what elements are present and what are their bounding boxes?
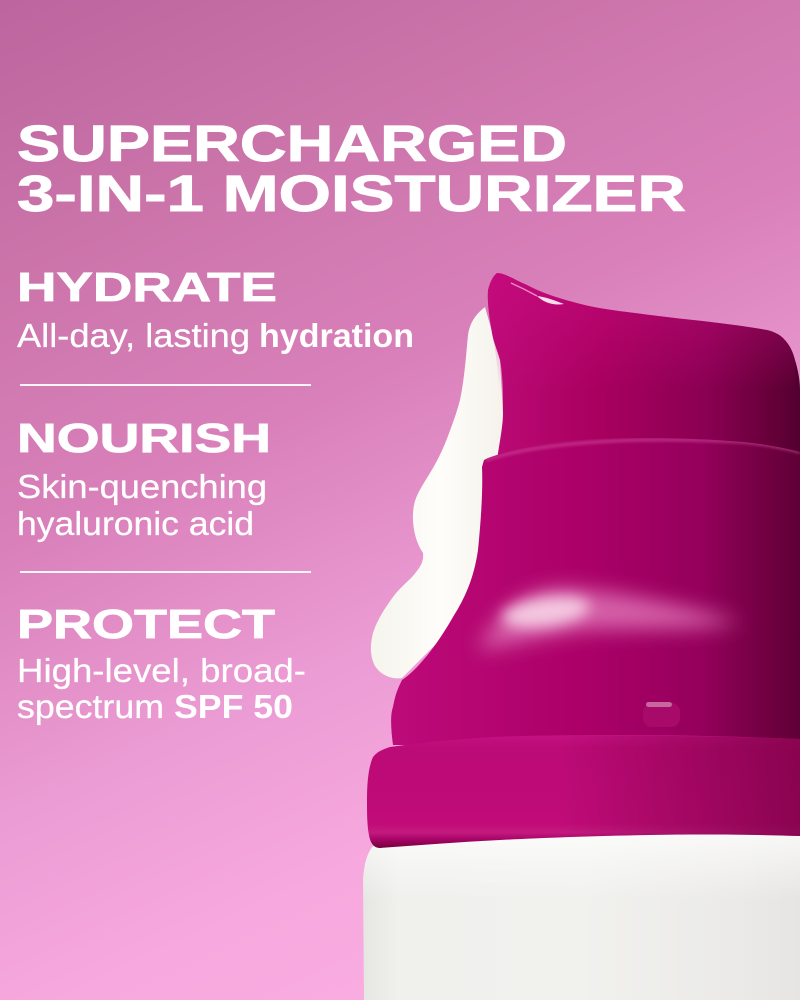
cream xyxy=(371,307,505,678)
text: nourish description: hyaluronic acid xyxy=(17,505,254,542)
text: hydrate description xyxy=(17,317,414,354)
text: hydrate description: All-day, lasting xyxy=(17,317,250,354)
text: nourish description xyxy=(17,468,267,542)
text: protect description: SPF 50 xyxy=(174,688,293,725)
text: protect description xyxy=(17,652,306,725)
product: pump bottle xyxy=(363,273,800,1000)
bottle body xyxy=(363,832,800,1000)
title: SUPERCHARGED xyxy=(17,115,567,172)
top rim highlight xyxy=(486,440,800,460)
text: protect description: spectrum xyxy=(17,688,164,725)
collar xyxy=(367,735,800,848)
small notch xyxy=(643,702,680,727)
pump nozzle xyxy=(488,273,800,460)
title xyxy=(17,115,686,222)
heading: nourish: NOURISH xyxy=(17,415,271,461)
text: hydrate description: hydration xyxy=(259,317,414,354)
sheen bright spot xyxy=(500,592,592,632)
nozzle highlight xyxy=(511,283,564,305)
divider: second xyxy=(20,571,311,573)
sheen on shoulder xyxy=(478,588,740,650)
divider: first xyxy=(20,384,311,386)
text: nourish description: Skin-quenching xyxy=(17,468,267,505)
title: 3-IN-1 MOISTURIZER xyxy=(17,165,686,222)
text: protect description: High-level, broad- xyxy=(17,652,306,689)
pump middle section xyxy=(391,438,800,745)
heading: hydrate: HYDRATE xyxy=(17,264,277,310)
heading: protect: PROTECT xyxy=(17,601,275,647)
